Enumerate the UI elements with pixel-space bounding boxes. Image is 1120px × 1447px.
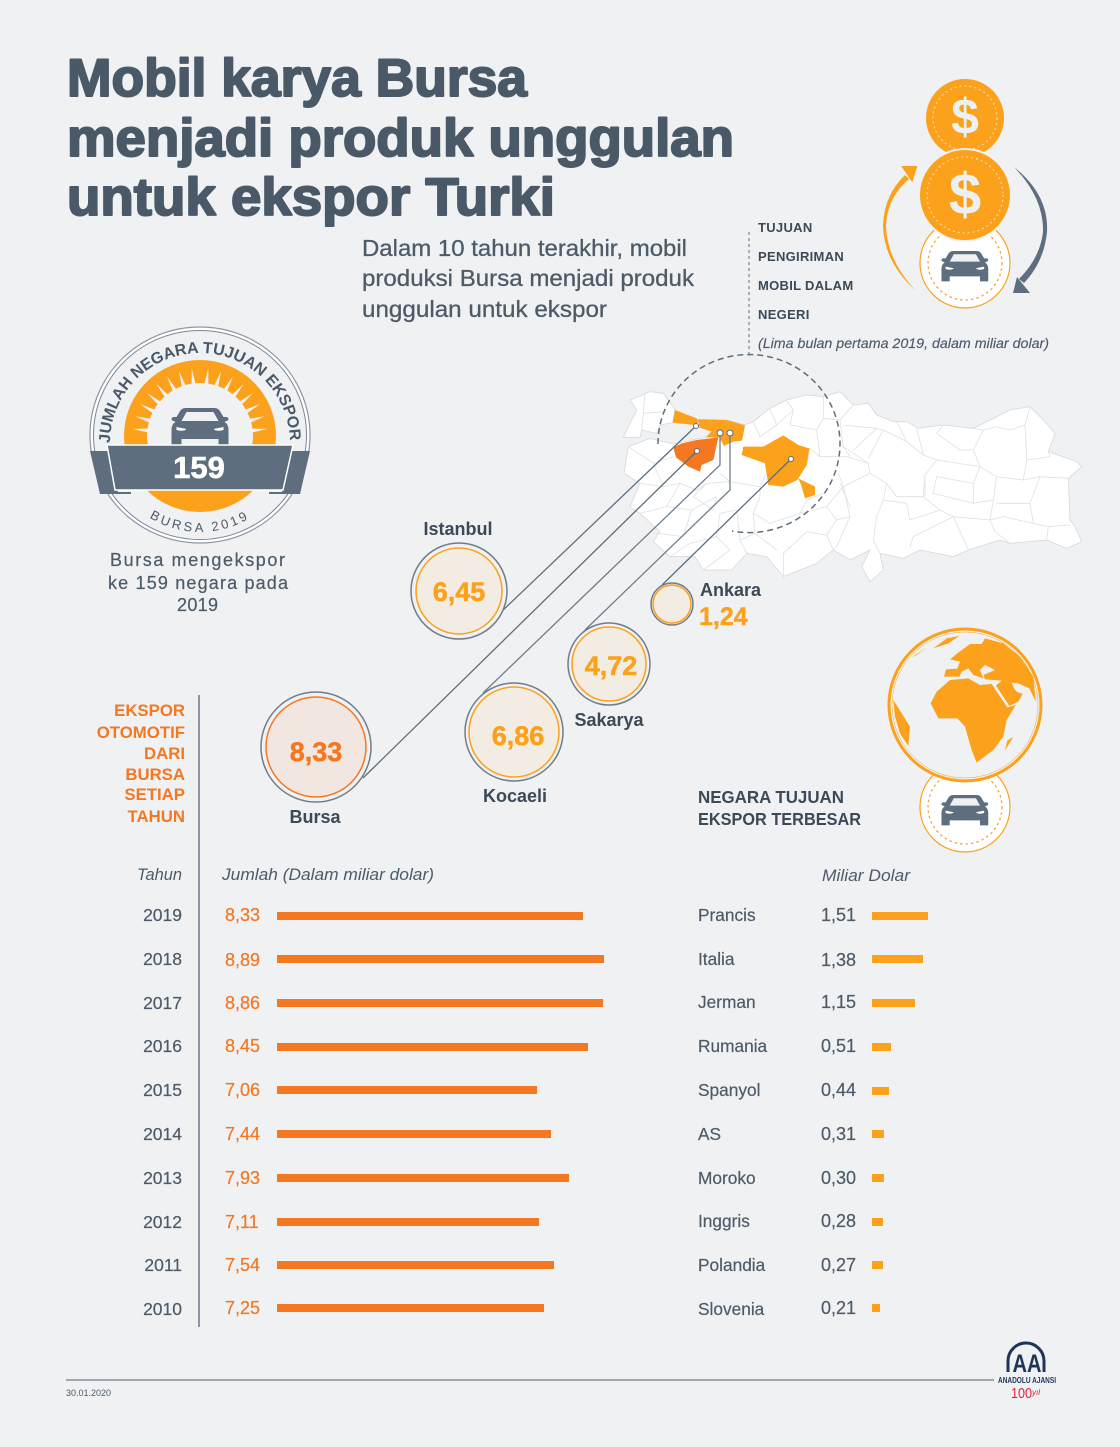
bar chart: exports by year: 2014	[143, 1124, 182, 1144]
map label: destination of car shipments: (Lima bulan pertama 2019, dalam miliar dolar)	[758, 335, 1049, 351]
bar chart: exports by country: 0,51	[821, 1036, 856, 1056]
bar chart: exports by country: Rumania	[698, 1036, 768, 1056]
bubble: Sakarya	[568, 623, 650, 730]
dashed focus circle	[658, 355, 840, 533]
bar chart: exports by country: Polandia	[698, 1255, 766, 1275]
bubble: Kocaeli: Kocaeli	[483, 786, 547, 806]
subtitle: Dalam 10 tahun terakhir, mobil	[362, 235, 687, 261]
column headers: left table	[137, 865, 434, 884]
bar chart: exports by year: 2011	[144, 1255, 182, 1275]
logo: Anadolu Ajansi: AA	[1012, 1350, 1042, 1378]
icon: coins and car cycle	[883, 79, 1047, 308]
bar chart: exports by year: 8,33	[225, 905, 260, 925]
bubble: Sakarya: 4,72	[585, 651, 637, 681]
icon: coins and car cycle: $	[949, 162, 981, 227]
heading: biggest export destinations: NEGARA TUJUAN	[698, 787, 844, 807]
heading: automotive exports from Bursa by year: SETIAP	[124, 785, 185, 804]
bubble: Kocaeli	[465, 683, 563, 806]
bar chart: exports by year: 7,44	[225, 1124, 260, 1144]
badge caption: Bursa mengekspor	[110, 550, 285, 570]
badge caption: ke 159 negara pada	[108, 573, 289, 593]
logo: Anadolu Ajansi: ANADOLU AJANSI	[998, 1375, 1056, 1385]
logo: Anadolu Ajansi: yıl	[1031, 1388, 1040, 1397]
province: Istanbul	[673, 410, 699, 425]
bar chart: exports by country	[698, 905, 928, 1319]
connector lines	[363, 424, 794, 778]
province: Sakarya	[719, 420, 745, 446]
bar chart: exports by country: Moroko	[698, 1168, 756, 1188]
bar chart: exports by country: 0,21	[821, 1298, 856, 1318]
bar chart: exports by country: 1,38	[821, 950, 856, 970]
bubble: Bursa: 8,33	[290, 737, 342, 767]
subtitle: unggulan untuk ekspor	[362, 296, 607, 322]
badge: number of export destination countries: BURSA 2019	[150, 510, 246, 532]
badge: number of export destination countries: 159	[173, 450, 225, 485]
bubble: Istanbul: 6,45	[433, 577, 485, 607]
bar chart: exports by country: 0,31	[821, 1124, 856, 1144]
bar chart: exports by country: Inggris	[698, 1211, 750, 1231]
bar chart: exports by year: 2010	[143, 1299, 182, 1319]
bar chart: exports by country: Prancis	[698, 905, 756, 925]
heading: biggest export destinations: EKSPOR TERBESAR	[698, 809, 861, 829]
bar chart: exports by year: 2013	[143, 1168, 182, 1188]
title: Mobil karya Bursa	[67, 49, 528, 108]
title: untuk ekspor Turki	[67, 168, 555, 227]
map label: destination of car shipments	[749, 220, 1049, 355]
bar chart: exports by year: 7,06	[225, 1080, 260, 1100]
bubble: Bursa	[261, 692, 371, 827]
logo: Anadolu Ajansi: 100	[1011, 1385, 1032, 1402]
column headers: left table: Tahun	[137, 865, 182, 884]
map label: destination of car shipments: MOBIL DALAM	[758, 278, 854, 293]
bar chart: exports by country: 1,15	[821, 992, 856, 1012]
date: 30.01.2020	[66, 1388, 111, 1398]
subtitle	[362, 235, 695, 322]
heading: automotive exports from Bursa by year: TAHUN	[128, 807, 185, 826]
bubble: Kocaeli: 6,86	[492, 721, 544, 751]
bubble: Sakarya: Sakarya	[574, 710, 645, 730]
bar chart: exports by country: 0,28	[821, 1211, 856, 1231]
province: Bursa	[673, 437, 718, 472]
heading: automotive exports from Bursa by year: OTOMOTIF	[97, 723, 185, 742]
bar chart: exports by year: 8,45	[225, 1036, 260, 1056]
heading: biggest export destinations	[698, 787, 861, 829]
footer rule	[66, 1379, 994, 1381]
table axis	[198, 695, 200, 1327]
bar chart: exports by year: 2016	[143, 1036, 182, 1056]
bubble: Bursa: Bursa	[289, 807, 341, 827]
bar chart: exports by country: Spanyol	[698, 1080, 760, 1100]
bubble: Istanbul	[411, 519, 507, 639]
bubble: Ankara: Ankara	[700, 580, 762, 600]
badge: number of export destination countries	[89, 326, 311, 544]
map label: destination of car shipments: NEGERI	[758, 307, 810, 322]
map label: destination of car shipments: PENGIRIMAN	[758, 249, 844, 264]
bar chart: exports by year: 7,93	[225, 1168, 260, 1188]
bar chart: exports by country: 0,44	[821, 1080, 856, 1100]
bar chart: exports by year: 2018	[143, 949, 182, 969]
title: menjadi produk unggulan	[67, 109, 734, 168]
bar chart: exports by country: Jerman	[698, 992, 756, 1012]
column header: right table: Miliar Dolar	[822, 866, 911, 885]
bar chart: exports by year: 8,86	[225, 993, 260, 1013]
bubble: Istanbul: Istanbul	[423, 519, 493, 539]
heading: automotive exports from Bursa by year: EKSPOR	[114, 701, 185, 720]
bar chart: exports by year: 2019	[143, 905, 182, 925]
bar chart: exports by country: Italia	[698, 949, 735, 969]
bar chart: exports by country: 0,30	[821, 1168, 856, 1188]
map of Turkey	[623, 392, 1082, 582]
bar chart: exports by year	[143, 905, 604, 1319]
bar chart: exports by year: 2012	[143, 1212, 182, 1232]
heading: automotive exports from Bursa by year	[97, 701, 185, 826]
bubble: Ankara	[651, 580, 762, 631]
icon: coins and car cycle: $	[951, 89, 979, 145]
bar chart: exports by year: 2015	[143, 1080, 182, 1100]
bar chart: exports by country: Slovenia	[698, 1299, 765, 1319]
bar chart: exports by country: 1,51	[821, 905, 856, 925]
map label: destination of car shipments: TUJUAN	[758, 220, 813, 235]
bar chart: exports by year: 8,89	[225, 950, 260, 970]
heading: automotive exports from Bursa by year: BURSA	[125, 765, 185, 784]
logo: Anadolu Ajansi	[998, 1343, 1056, 1402]
badge: number of export destination countries: JUMLAH NEGARA TUJUAN EKSPOR	[99, 342, 301, 443]
bar chart: exports by year: 7,25	[225, 1298, 260, 1318]
bar chart: exports by year: 2017	[143, 993, 182, 1013]
column headers: left table: Jumlah (Dalam miliar dolar)	[221, 865, 434, 884]
badge caption: 2019	[177, 595, 218, 615]
bar chart: exports by country: 0,27	[821, 1255, 856, 1275]
title	[67, 49, 734, 227]
bar chart: exports by year: 7,11	[225, 1212, 259, 1232]
bar chart: exports by country: AS	[698, 1124, 721, 1144]
badge caption	[108, 550, 289, 615]
bubble: Ankara: 1,24	[699, 603, 748, 631]
province: Ankara	[742, 435, 809, 487]
heading: automotive exports from Bursa by year: DARI	[144, 744, 185, 763]
subtitle: produksi Bursa menjadi produk	[362, 265, 695, 291]
province: Kocaeli	[698, 419, 730, 437]
icon: globe and car	[889, 629, 1041, 852]
bar chart: exports by year: 7,54	[225, 1255, 260, 1275]
